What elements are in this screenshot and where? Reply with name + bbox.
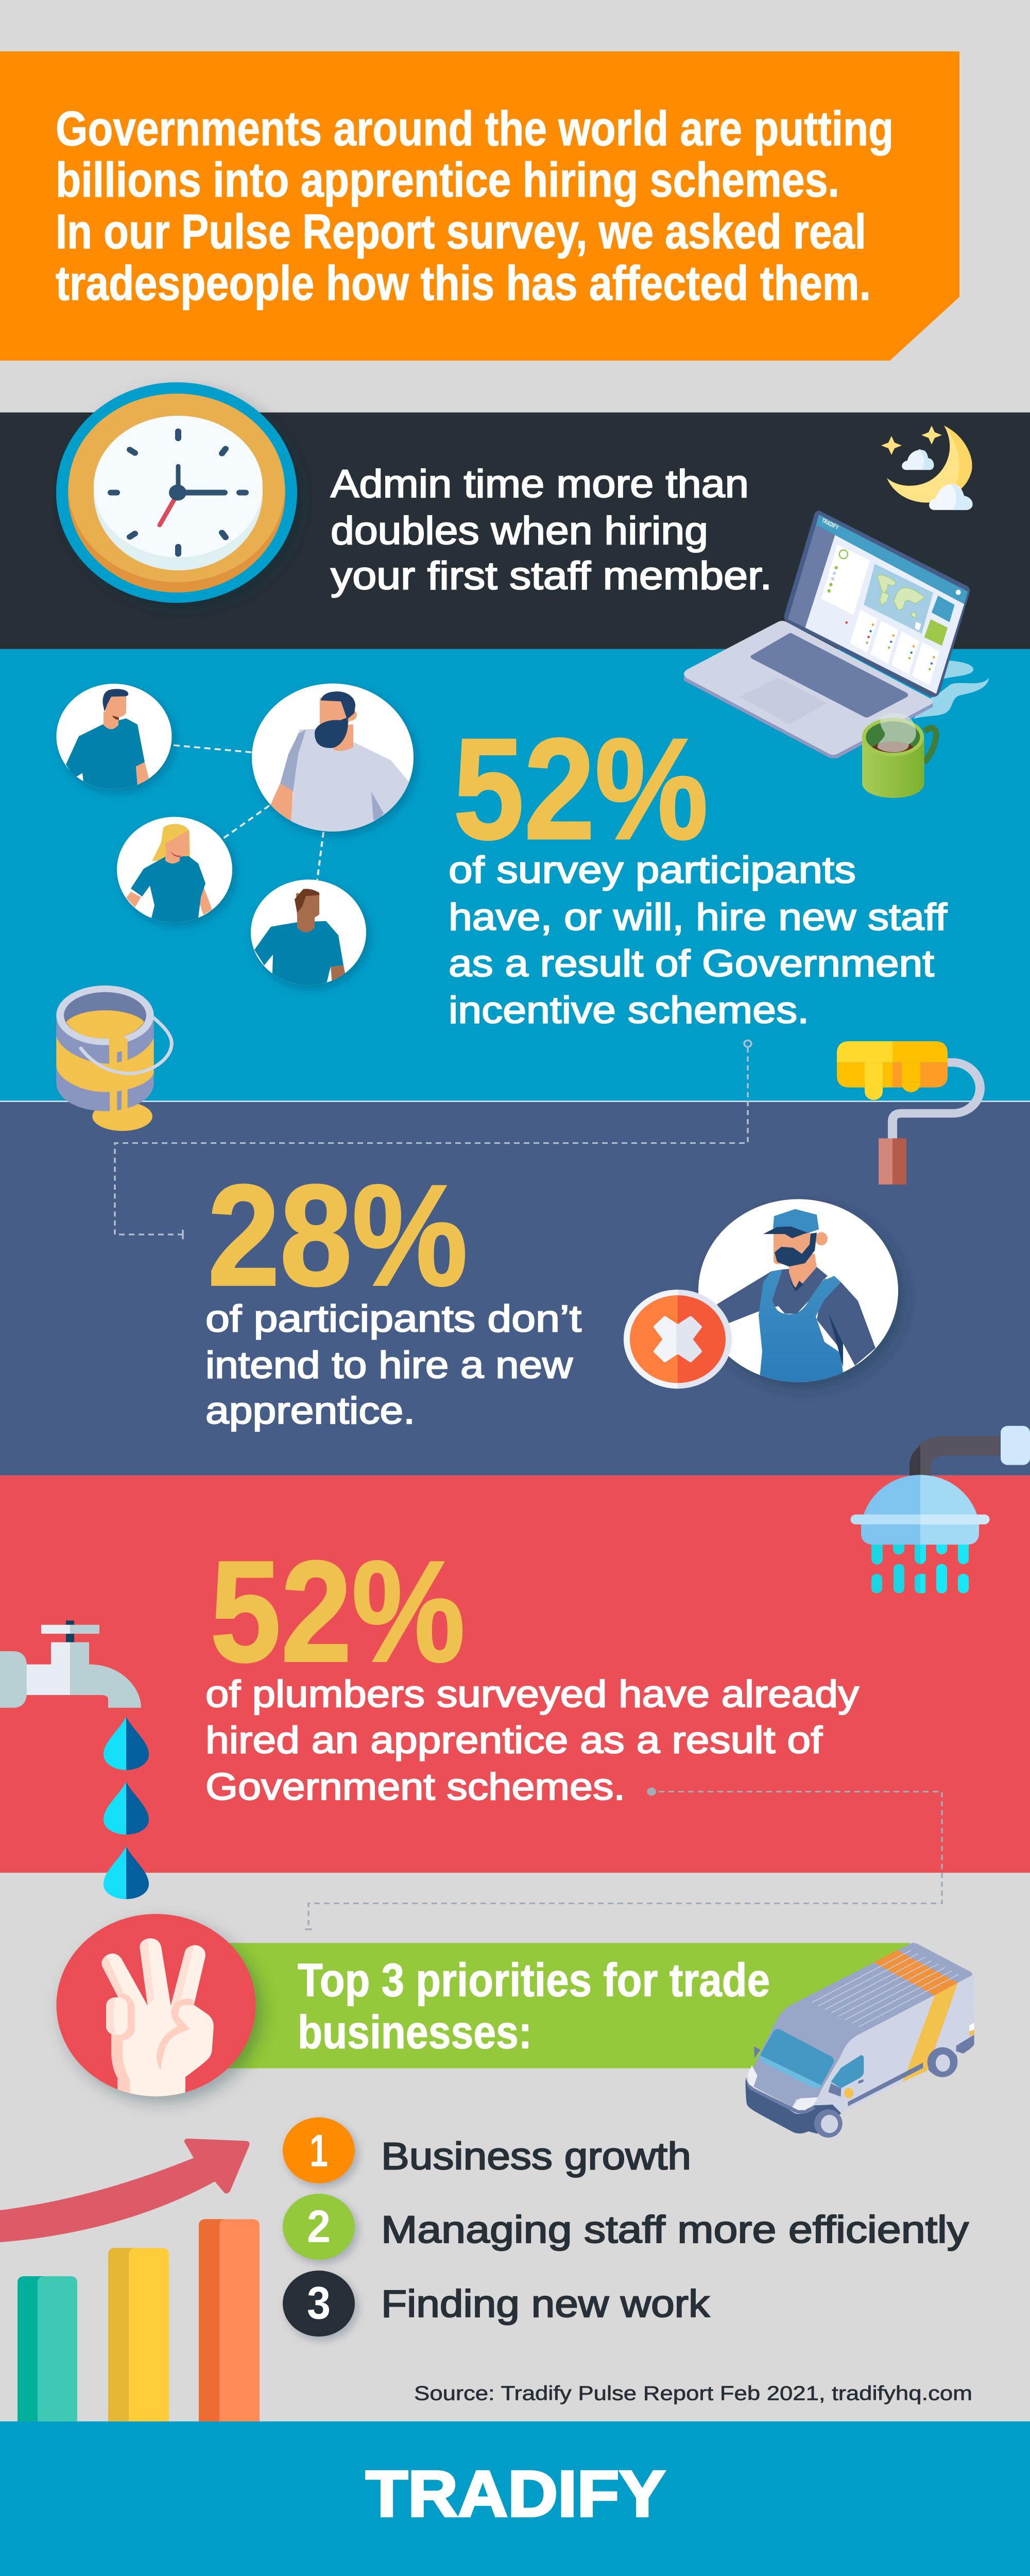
laptop base <box>684 677 933 758</box>
panel: priorities heading <box>156 1943 911 2069</box>
laptop screen <box>784 511 970 697</box>
water drops <box>871 1541 925 1593</box>
description: intend to hire a new <box>205 1344 573 1386</box>
person: bearded man <box>252 684 414 839</box>
keyboard <box>750 633 908 718</box>
big number: 52% <box>453 708 708 869</box>
bar 1 <box>18 2276 77 2421</box>
stat: 52% of survey participants <box>449 708 948 1031</box>
screen cards <box>850 609 940 685</box>
drops <box>104 1717 149 1899</box>
icon: tap with drops <box>0 1620 149 1899</box>
banner shape <box>0 52 959 361</box>
description <box>205 1298 581 1432</box>
item 1: 1 <box>310 2125 328 2176</box>
van windows <box>761 2029 834 2088</box>
stat: 52% of plumbers <box>205 1531 860 1808</box>
mug <box>924 728 936 762</box>
van rear <box>956 2035 974 2054</box>
band: no new apprentice <box>0 1101 1030 1476</box>
van stripes <box>874 1950 958 1995</box>
trackpad <box>740 677 828 724</box>
item 1 <box>283 2117 691 2183</box>
chart: rising bars with arrow <box>0 2139 260 2421</box>
screen map <box>864 564 933 634</box>
panel: intro banner <box>0 52 959 361</box>
shower pipe <box>920 1446 1002 1478</box>
dashed connectors <box>174 745 323 880</box>
arrow: dashed connector to 28% <box>115 1040 751 1239</box>
description <box>205 1673 860 1808</box>
screen logo: TRADIFY <box>820 517 840 531</box>
text: admin time: doubles when hiring <box>331 509 708 552</box>
item 2 <box>283 2194 969 2260</box>
steam <box>913 660 989 719</box>
description: incentive schemes. <box>449 989 809 1031</box>
description: have, or will, hire new staff <box>449 896 948 938</box>
list: top 3 priorities <box>283 2117 969 2336</box>
person: woman <box>117 817 232 926</box>
intro text <box>56 101 894 310</box>
arrow: dashed connector to priorities <box>305 1788 942 1929</box>
icon: connected team <box>57 684 414 988</box>
big number: 28% <box>208 1155 468 1315</box>
description <box>449 850 948 1031</box>
van roof and front <box>748 1943 972 2107</box>
van side <box>814 1975 974 2112</box>
description: apprentice. <box>205 1390 415 1432</box>
bar 2 <box>108 2248 169 2421</box>
stat: 28% of participants <box>205 1155 581 1432</box>
band: admin time <box>0 413 1030 649</box>
item 3: Finding new work <box>381 2283 710 2325</box>
heading text <box>298 1955 770 2058</box>
boundary line between blue and navy bands <box>0 1100 1030 1102</box>
item 3 <box>283 2270 710 2336</box>
screen summary card <box>821 545 870 615</box>
band: plumbers <box>0 1476 1030 1873</box>
description: of plumbers surveyed have already <box>205 1673 860 1715</box>
intro text: billions into apprentice hiring schemes. <box>56 153 839 207</box>
icon: clock <box>56 382 297 603</box>
icon: paint roller <box>837 1041 980 1184</box>
big number: 52% <box>210 1531 465 1691</box>
icon: tradesman with cross badge <box>624 1199 898 1388</box>
icon: shower <box>851 1426 1030 1593</box>
icon: hand showing three fingers <box>57 1914 255 2097</box>
van headlights <box>748 2065 758 2087</box>
item 2: 2 <box>307 2201 331 2252</box>
icon: paint bucket <box>56 986 171 1131</box>
item 1: Business growth <box>381 2136 691 2178</box>
description: of participants don’t <box>205 1298 581 1340</box>
van bumper <box>746 2077 841 2133</box>
description: as a result of Government <box>449 943 934 985</box>
text: admin time: Admin time more than <box>331 462 749 505</box>
icon: moon, stars and clouds <box>881 426 973 510</box>
logo: Tradify: TRADIFY <box>366 2458 665 2530</box>
band: footer <box>0 2421 1030 2576</box>
text: admin time: your first staff member. <box>331 554 772 598</box>
item 3: 3 <box>307 2277 331 2329</box>
item 2: Managing staff more efficiently <box>381 2209 969 2251</box>
description: Government schemes. <box>205 1766 625 1808</box>
van wheels <box>814 2109 843 2138</box>
arrow <box>0 2139 249 2242</box>
green banner <box>156 1943 911 2069</box>
icon: laptop and mug <box>684 511 989 798</box>
icon: cross badge <box>624 1290 732 1388</box>
heading text: businesses: <box>298 2006 532 2058</box>
person: bottom man <box>251 879 366 988</box>
description: of survey participants <box>449 850 856 891</box>
bar 3 <box>199 2219 260 2421</box>
icon: van <box>746 1943 974 2138</box>
text: admin time <box>331 462 772 598</box>
van wheels back <box>926 2045 957 2076</box>
heading text: Top 3 priorities for trade <box>298 1955 770 2007</box>
person: top left <box>57 684 172 796</box>
source note: Source: Tradify Pulse Report Feb 2021, tradifyhq.com <box>414 2382 972 2404</box>
band: survey participants <box>0 649 1030 1101</box>
description: hired an apprentice as a result of <box>205 1720 823 1761</box>
shower head <box>861 1475 920 1545</box>
